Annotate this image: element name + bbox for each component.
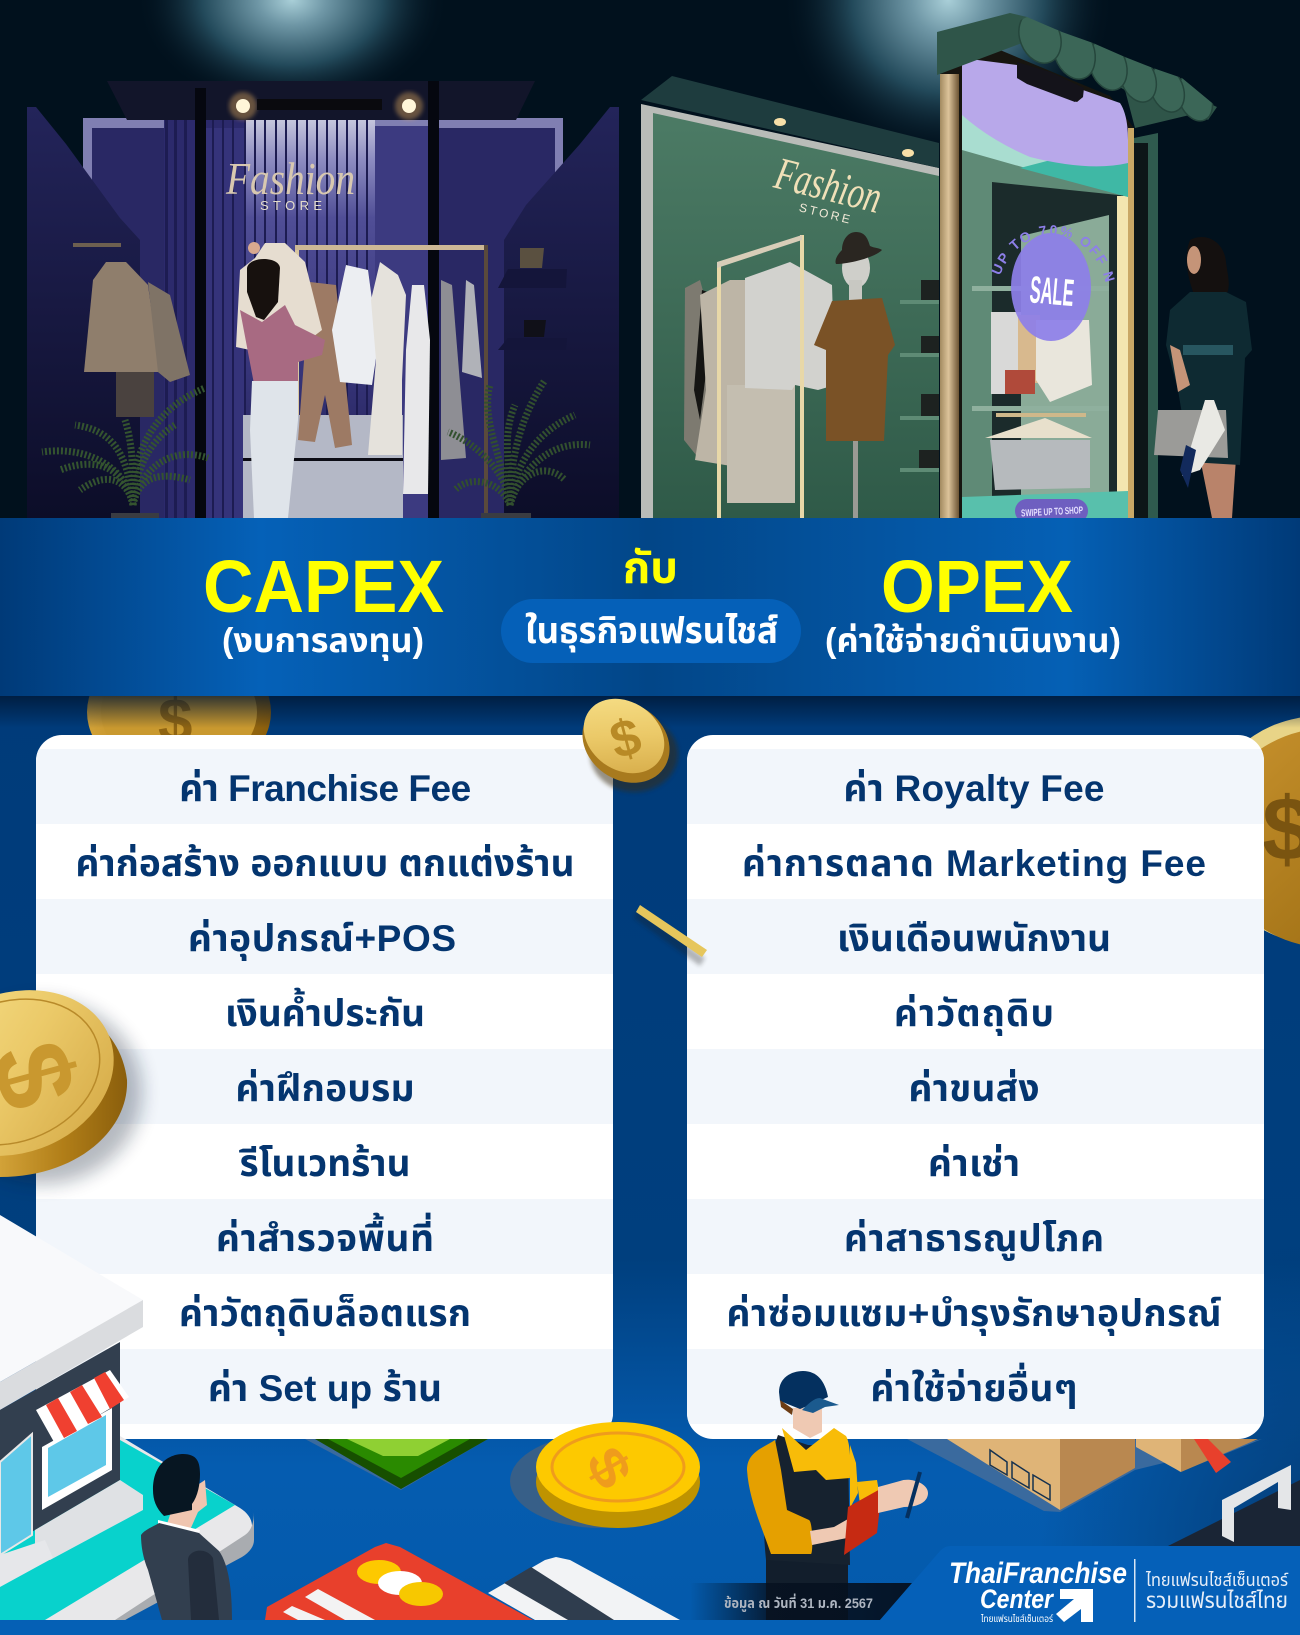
capex row 3: ค่าอุปกรณ์+POS: [188, 918, 456, 961]
silver frame: [641, 104, 939, 518]
screen purple: [962, 58, 1128, 166]
opex row 3: เงินเดือนพนักงาน: [837, 918, 1111, 959]
brand tagline: รวมแฟรนไชส์ไทย: [1146, 1588, 1288, 1613]
date strip: [690, 1583, 912, 1620]
opex row 4: ค่าวัตถุดิบ: [894, 993, 1054, 1036]
flying coin: $: [604, 707, 647, 771]
brand name: ThaiFranchise: [949, 1557, 1127, 1590]
opex row 8: ค่าซ่อมแซม+บำรุงรักษาอุปกรณ์: [726, 1293, 1222, 1336]
swipe button: [1015, 499, 1088, 523]
roof edge: [0, 1300, 143, 1410]
flying coin: [567, 683, 685, 800]
factory worker: [747, 1371, 928, 1620]
sale circle: [1011, 233, 1091, 341]
door: [0, 1434, 32, 1555]
mannequin: [814, 232, 895, 518]
opex row 2: ค่าการตลาด Marketing Fee: [742, 843, 1206, 884]
opex row 9: ค่าใช้จ่ายอื่นๆ: [870, 1362, 1078, 1409]
clothes rack centre: [243, 245, 488, 518]
CAPEX subtitle: (งบการลงทุน): [222, 622, 424, 661]
silver card: [488, 1557, 680, 1620]
credit cards: [265, 1543, 680, 1620]
shelves: [498, 248, 567, 350]
plinth: [35, 1480, 143, 1560]
store sign: Fashion: [769, 147, 887, 223]
lower background tint: [1000, 1240, 1300, 1635]
store sign: STORE: [260, 198, 322, 213]
brand divider: [1134, 1559, 1136, 1622]
red card: [265, 1543, 533, 1620]
teal platform: [0, 1436, 254, 1620]
left fashion store: [27, 81, 619, 518]
sale circle: SALE: [1028, 269, 1076, 315]
plant left: [42, 388, 208, 505]
opex row 7: ค่าสาธารณูปโภค: [844, 1218, 1104, 1261]
plant pots: [111, 513, 531, 518]
big gold coin: [0, 963, 142, 1184]
woman looking at phone: [1154, 237, 1252, 518]
phone right edge: [1128, 128, 1134, 518]
gold bar: [634, 905, 707, 966]
OPEX heading: OPEX: [881, 545, 1073, 628]
left side wall: [27, 107, 140, 518]
banknote: [305, 1439, 488, 1490]
footer bar: [0, 1620, 1300, 1635]
soffit: [641, 76, 939, 168]
interior clothes: [972, 286, 1109, 490]
spotlight right: [783, 0, 1113, 160]
capex row 5: ค่าฝึกอบรม: [236, 1068, 414, 1109]
lower background: [0, 696, 1300, 1635]
brand tagline: ไทยแฟรนไชส์เซ็นเตอร์: [1145, 1570, 1289, 1590]
window: [42, 1408, 112, 1510]
hero background: [0, 0, 1300, 518]
flat gold coin: [510, 1422, 700, 1528]
wall shelves with shoes: [900, 280, 939, 472]
brand tagline: [1145, 1570, 1289, 1613]
brand panel: [880, 1546, 1300, 1625]
shop building: [0, 1215, 254, 1620]
right fashion store: [641, 76, 939, 518]
cardboard boxes: [907, 1439, 1262, 1512]
date strip: ข้อมูล ณ วันที่ 31 ม.ค. 2567: [724, 1593, 873, 1613]
phone gold body: [940, 50, 1134, 518]
capex row 9: ค่า Set up ร้าน: [208, 1368, 442, 1409]
box icons: [990, 1450, 1050, 1500]
brand small line: ไทยแฟรนไชส์เซ็นเตอร์: [980, 1612, 1053, 1625]
capex row 8: ค่าวัตถุดิบล็อตแรก: [179, 1293, 471, 1336]
capex row 4: เงินค้ำประกัน: [225, 987, 425, 1034]
screen teal: [962, 112, 1128, 197]
phone lower interior: [962, 150, 1128, 518]
green wall: [653, 112, 939, 518]
ceiling lights: [229, 92, 423, 120]
title banner: [0, 518, 1300, 696]
pillars: [195, 81, 439, 518]
screen bottom teal: [962, 491, 1128, 518]
capex rows striping: [36, 749, 613, 1424]
capex row 1: ค่า Franchise Fee: [179, 768, 471, 809]
door frame behind phone: [1134, 133, 1158, 518]
brand center: Center: [980, 1584, 1054, 1614]
phone storefront: [940, 50, 1134, 520]
banner shadow: [0, 696, 1300, 728]
franchise pill: [501, 599, 801, 663]
store sign: Fashion: [225, 153, 355, 204]
brand arrow: [1056, 1589, 1093, 1622]
woman shopping: [236, 242, 325, 518]
CAPEX heading: CAPEX: [203, 545, 444, 628]
card: CAPEX list: [36, 735, 613, 1439]
flat gold coin: $: [574, 1437, 644, 1498]
OPEX subtitle: (ค่าใช้จ่ายดำเนินงาน): [825, 622, 1121, 660]
opex row 1: ค่า Royalty Fee: [844, 768, 1104, 809]
notch: [1017, 62, 1084, 102]
opex row 6: ค่าเช่า: [928, 1143, 1020, 1184]
spotlight left: [137, 0, 447, 112]
awning: [107, 81, 535, 120]
connector word: กับ: [623, 544, 678, 593]
wall lights: [774, 118, 914, 157]
capex row 2: ค่าก่อสร้าง ออกแบบ ตกแต่งร้าน: [76, 843, 574, 884]
shop wall: [0, 1342, 120, 1552]
awning stripes: [36, 1370, 129, 1442]
clothes on rack: [684, 235, 835, 518]
businessman: [141, 1454, 232, 1620]
opex row 5: ค่าขนส่ง: [908, 1068, 1040, 1109]
steps: [0, 1540, 53, 1587]
coin behind left card: $: [158, 687, 192, 756]
left store back wall: [83, 118, 563, 518]
capex row 7: ค่าสำรวจพื้นที่: [216, 1212, 434, 1259]
clothes rack left: [73, 243, 190, 417]
card: OPEX list: [687, 735, 1264, 1439]
franchise pill: ในธุรกิจแฟรนไชส์: [525, 610, 778, 652]
teal darker band: [1020, 140, 1128, 197]
capex row 6: รีโนเวทร้าน: [239, 1143, 410, 1184]
plant right: [448, 380, 590, 505]
right side wall: [504, 107, 619, 518]
swipe button: SWIPE UP TO SHOP: [1021, 505, 1084, 520]
coin behind right card: [1202, 716, 1300, 948]
conveyor: [1168, 1465, 1300, 1546]
opex rows striping: [687, 749, 1264, 1424]
shop roof: [0, 1215, 143, 1382]
velvet awning: [937, 4, 1219, 128]
coin behind left card: [87, 696, 271, 735]
store sign: STORE: [798, 200, 851, 227]
